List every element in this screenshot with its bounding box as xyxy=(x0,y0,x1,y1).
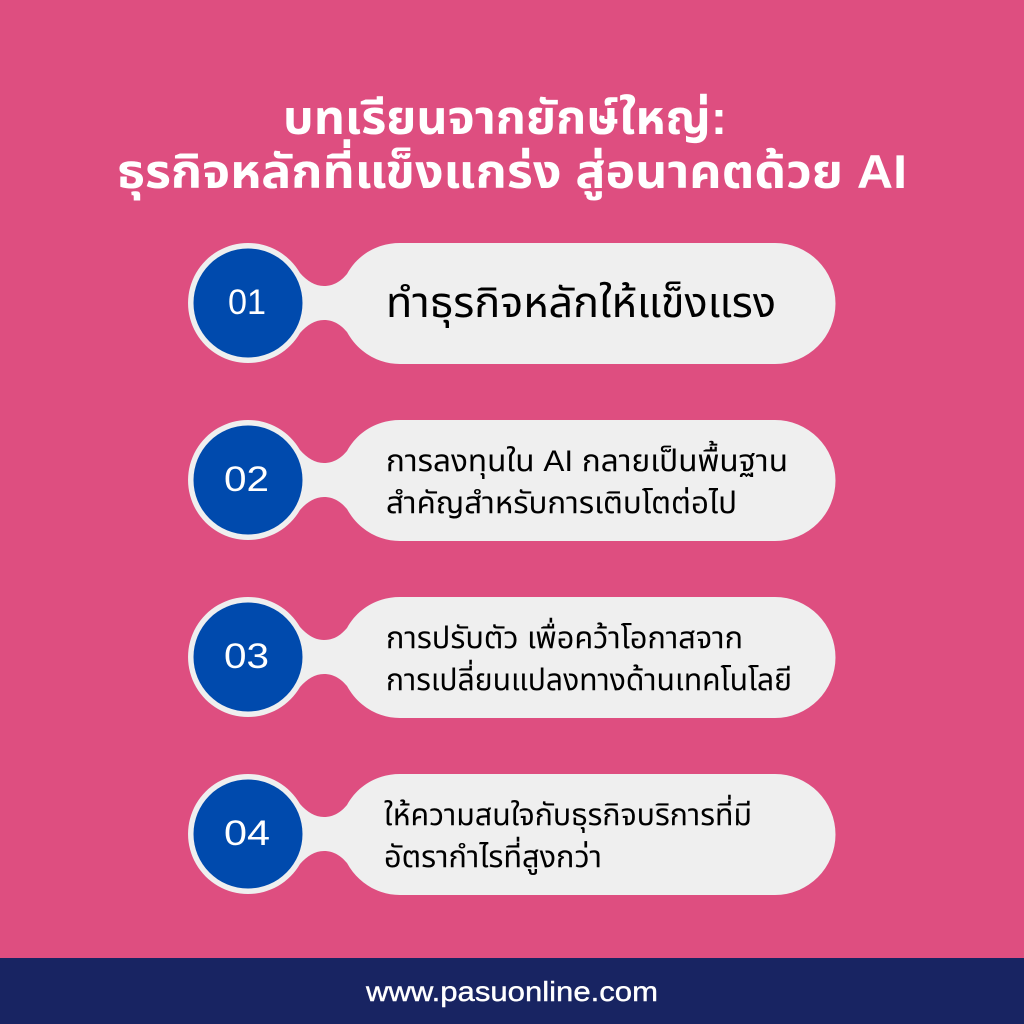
step 04: ให้ความสนใจกับธุรกิจบริการที่มี xyxy=(384,794,752,833)
step 03 xyxy=(188,597,835,718)
step 04: อัตรากำไรที่สูงกว่า xyxy=(384,836,602,875)
step 03: การเปลี่ยนแปลงทางด้านเทคโนโลยี xyxy=(386,659,792,697)
step 02: 02 xyxy=(224,460,269,499)
step 03: การปรับตัว เพื่อคว้าโอกาสจาก xyxy=(386,617,743,655)
step 04: 04 xyxy=(224,814,270,853)
step 02: สำคัญสำหรับการเติบโตต่อไป xyxy=(386,487,737,520)
step 04 xyxy=(188,774,835,895)
step 01: 01 xyxy=(228,283,266,322)
title: บทเรียนจากยักษ์ใหญ่: xyxy=(283,91,727,144)
step 01 xyxy=(188,243,835,364)
step 01: ทำธุรกิจหลักให้แข็งแรง xyxy=(386,279,776,328)
step 02: การลงทุนใน AI กลายเป็นพื้นฐาน xyxy=(386,440,788,479)
title xyxy=(117,91,907,200)
footer bar xyxy=(0,958,1024,1024)
step 02 xyxy=(188,420,835,541)
title: ธุรกิจหลักที่แข็งแกร่ง สู่อนาคตด้วย AI xyxy=(117,139,907,200)
step 03: 03 xyxy=(224,637,269,676)
footer bar: www.pasuonline.com xyxy=(365,976,658,1007)
